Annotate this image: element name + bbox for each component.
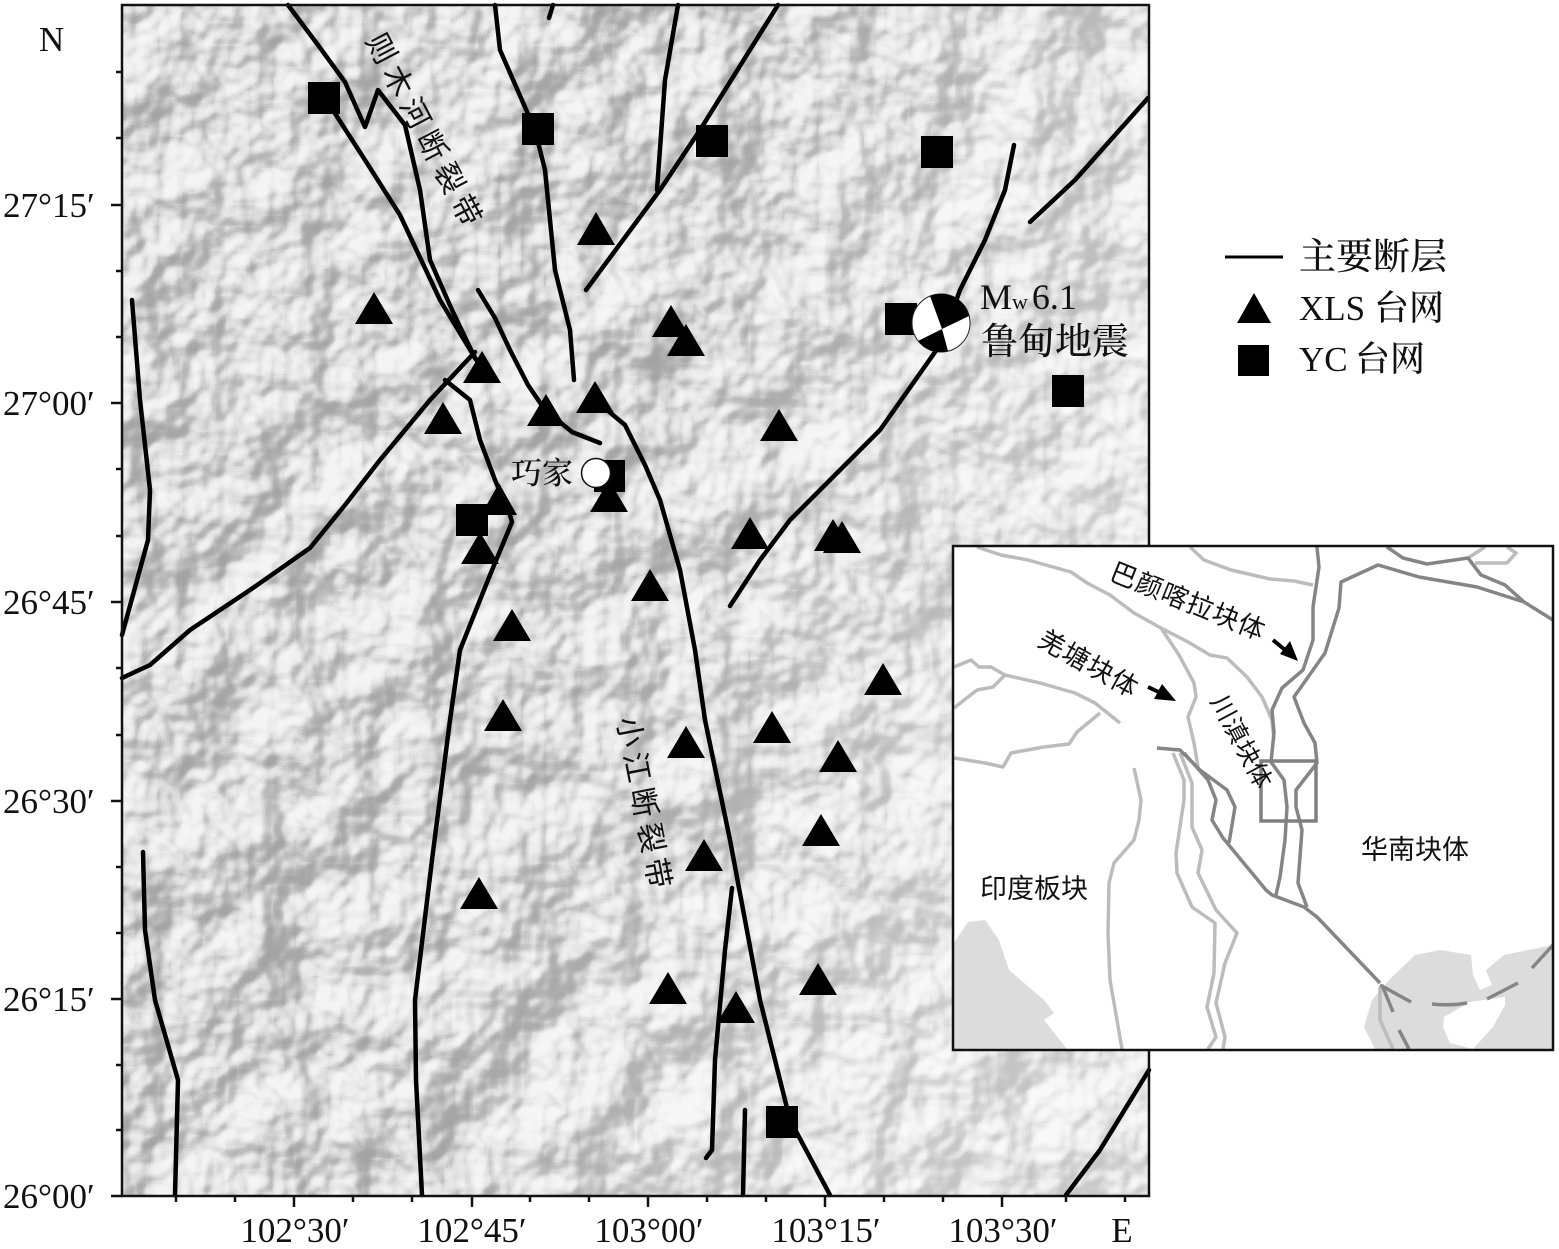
longitude labels: 102°30′: [240, 1211, 350, 1249]
map axes: frame and ticks: [111, 5, 1149, 1207]
inset dark faults: [1157, 547, 1553, 1049]
legend: XLS network: XLS: [1299, 289, 1365, 328]
latitude labels: 26°45′: [3, 583, 95, 622]
longitude labels: [240, 1211, 1133, 1249]
major fault lines: [122, 5, 1149, 1195]
Xiaojiang fault zone label: 小江断裂带: [610, 714, 677, 897]
inset land/sea shading: [954, 920, 1553, 1049]
Zemuhe fault zone label: 则木河断裂带: [359, 28, 490, 238]
latitude labels: 27°15′: [3, 186, 95, 225]
Qiaojia label: 巧家: [511, 448, 573, 493]
focal mechanism: Ludian earthquake beachball: [912, 294, 970, 352]
longitude labels: 103°15′: [771, 1211, 881, 1249]
inset map: tectonic blocks: [953, 546, 1553, 1050]
latitude labels: 27°00′: [3, 384, 95, 423]
latitude labels: 26°00′: [3, 1177, 95, 1216]
legend: XLS network: 台网: [1374, 281, 1444, 331]
map panel: shaded relief terrain: [122, 5, 1149, 1196]
legend: main fault: 主要断层: [1299, 226, 1448, 280]
legend: YC network: [1238, 332, 1425, 382]
inset arrow: Bayan Har direction: [1273, 640, 1298, 661]
inset light faults: [954, 547, 1516, 1049]
longitude labels: E: [1111, 1211, 1133, 1249]
earthquake magnitude label: Mw6.1: [980, 277, 1077, 317]
legend: YC network: YC: [1299, 340, 1348, 379]
latitude labels: 26°30′: [3, 782, 95, 821]
latitude labels: [3, 20, 95, 1216]
inset study area box: [1261, 761, 1316, 821]
inset label: Indian plate: 印度板块: [980, 874, 1088, 904]
legend: [1225, 226, 1448, 382]
inset label: Chuandian block: 川滇块体: [1205, 691, 1277, 794]
inset label: Bayan Har block: 巴颜喀拉块体: [1106, 557, 1270, 646]
XLS network stations: triangles: [355, 212, 902, 1023]
YC network stations: squares: [308, 82, 1084, 1138]
latitude labels: 26°15′: [3, 980, 95, 1019]
inset frame: [953, 546, 1553, 1050]
inset arrow: Qiangtang direction: [1148, 684, 1176, 701]
inset label: South China block: 华南块体: [1361, 835, 1469, 865]
Qiaojia marker: [582, 458, 610, 488]
latitude labels: N: [39, 20, 64, 59]
earthquake name label: 鲁甸地震: [981, 311, 1129, 365]
longitude labels: 102°45′: [417, 1211, 527, 1249]
inset label: Qiangtang block: 羌塘块体: [1033, 624, 1144, 704]
legend: YC network: 台网: [1355, 332, 1425, 382]
longitude labels: 103°00′: [594, 1211, 704, 1249]
longitude labels: 103°30′: [948, 1211, 1058, 1249]
legend: XLS network: [1237, 281, 1444, 331]
